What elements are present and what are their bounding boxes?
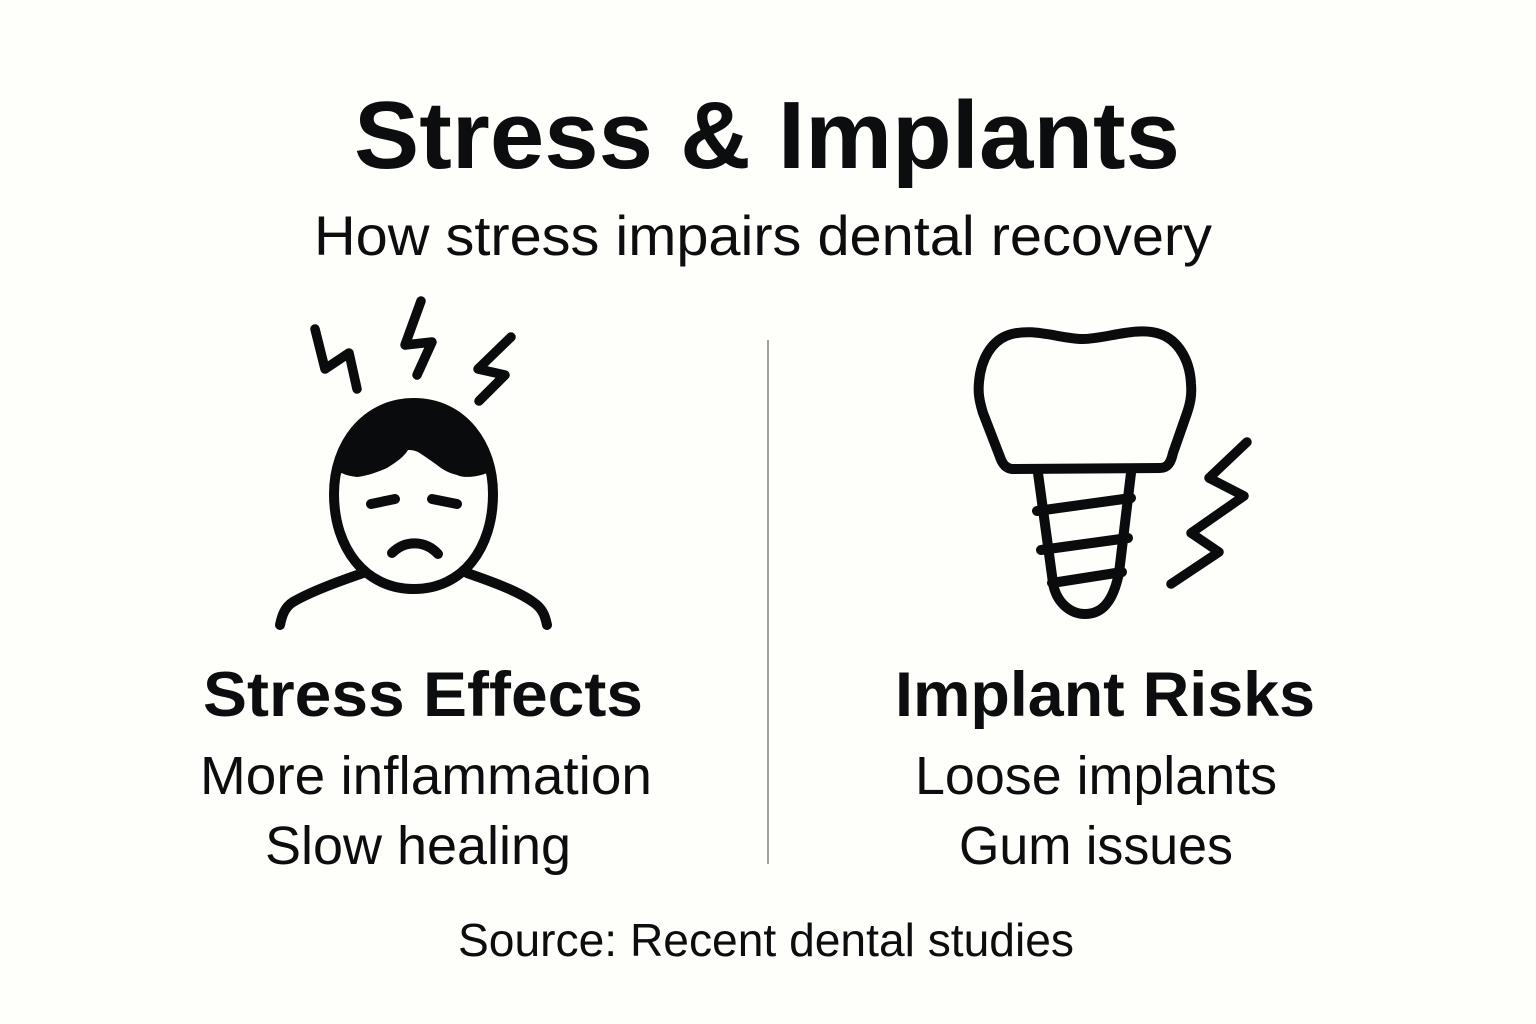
heading: Stress Effects [203, 660, 643, 730]
icon: head [334, 403, 493, 589]
text: slow healing: Slow healing [265, 816, 571, 876]
icon: dental implant [979, 331, 1247, 614]
text: loose implants: Loose implants [915, 746, 1277, 806]
icon: pain bolt [1171, 442, 1247, 584]
icon: hair [334, 400, 494, 478]
icon: shoulders [280, 573, 547, 625]
panel: implant risks [895, 660, 1315, 876]
text: gum issues: Gum issues [959, 816, 1233, 876]
icon: eyes [371, 499, 457, 504]
icon: implant screw [1037, 473, 1131, 614]
title: Stress & Implants [354, 82, 1180, 189]
panel: stress effects [200, 660, 652, 876]
icon: lightning bolts [315, 301, 511, 401]
icon: frown [392, 543, 438, 554]
icon: crown [979, 331, 1191, 469]
icon: stressed person [280, 301, 547, 625]
heading: Implant Risks [895, 660, 1315, 730]
text: more inflammation: More inflammation [200, 746, 652, 806]
subtitle: How stress impairs dental recovery [314, 204, 1212, 267]
source note: Source: Recent dental studies [458, 914, 1074, 966]
